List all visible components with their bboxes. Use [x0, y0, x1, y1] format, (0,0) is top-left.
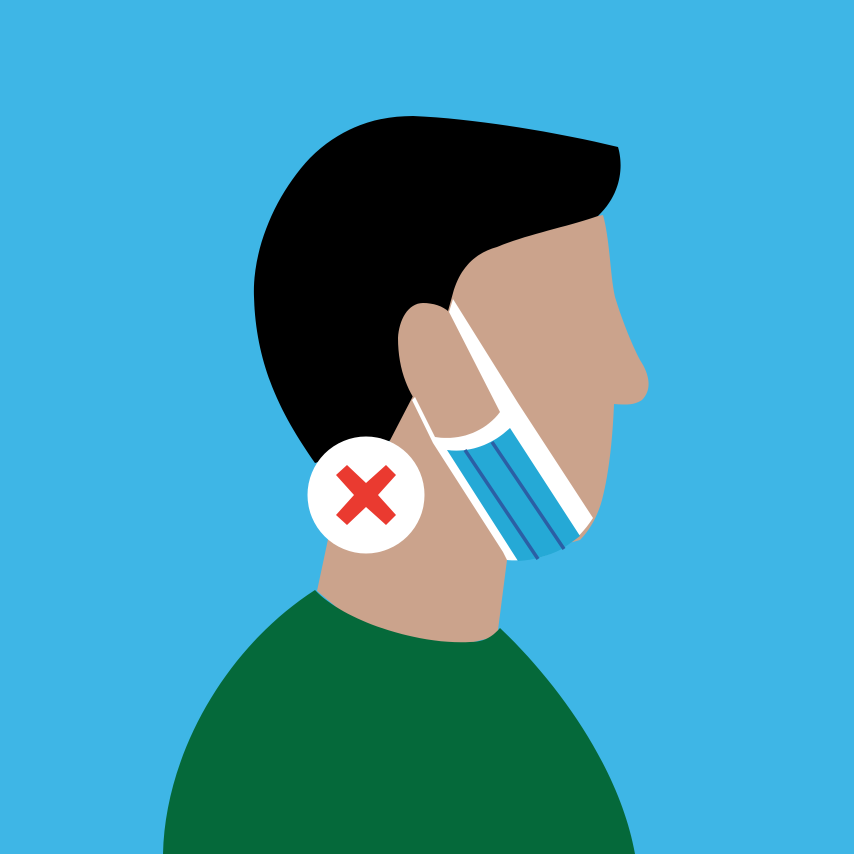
- ear: [398, 303, 505, 445]
- face: [430, 215, 649, 560]
- shirt: [163, 590, 635, 854]
- mask blue pleated panel: [447, 428, 580, 561]
- mask white body and ear straps: [412, 299, 593, 560]
- red cross: [336, 465, 396, 525]
- neck: [317, 396, 520, 660]
- icon: red cross in white circle: [308, 436, 424, 554]
- mask pleat line 2: [492, 442, 564, 549]
- white circle: [308, 436, 424, 554]
- face mask: [412, 299, 593, 561]
- mask pleat line 1: [465, 450, 538, 559]
- hair: [254, 116, 621, 463]
